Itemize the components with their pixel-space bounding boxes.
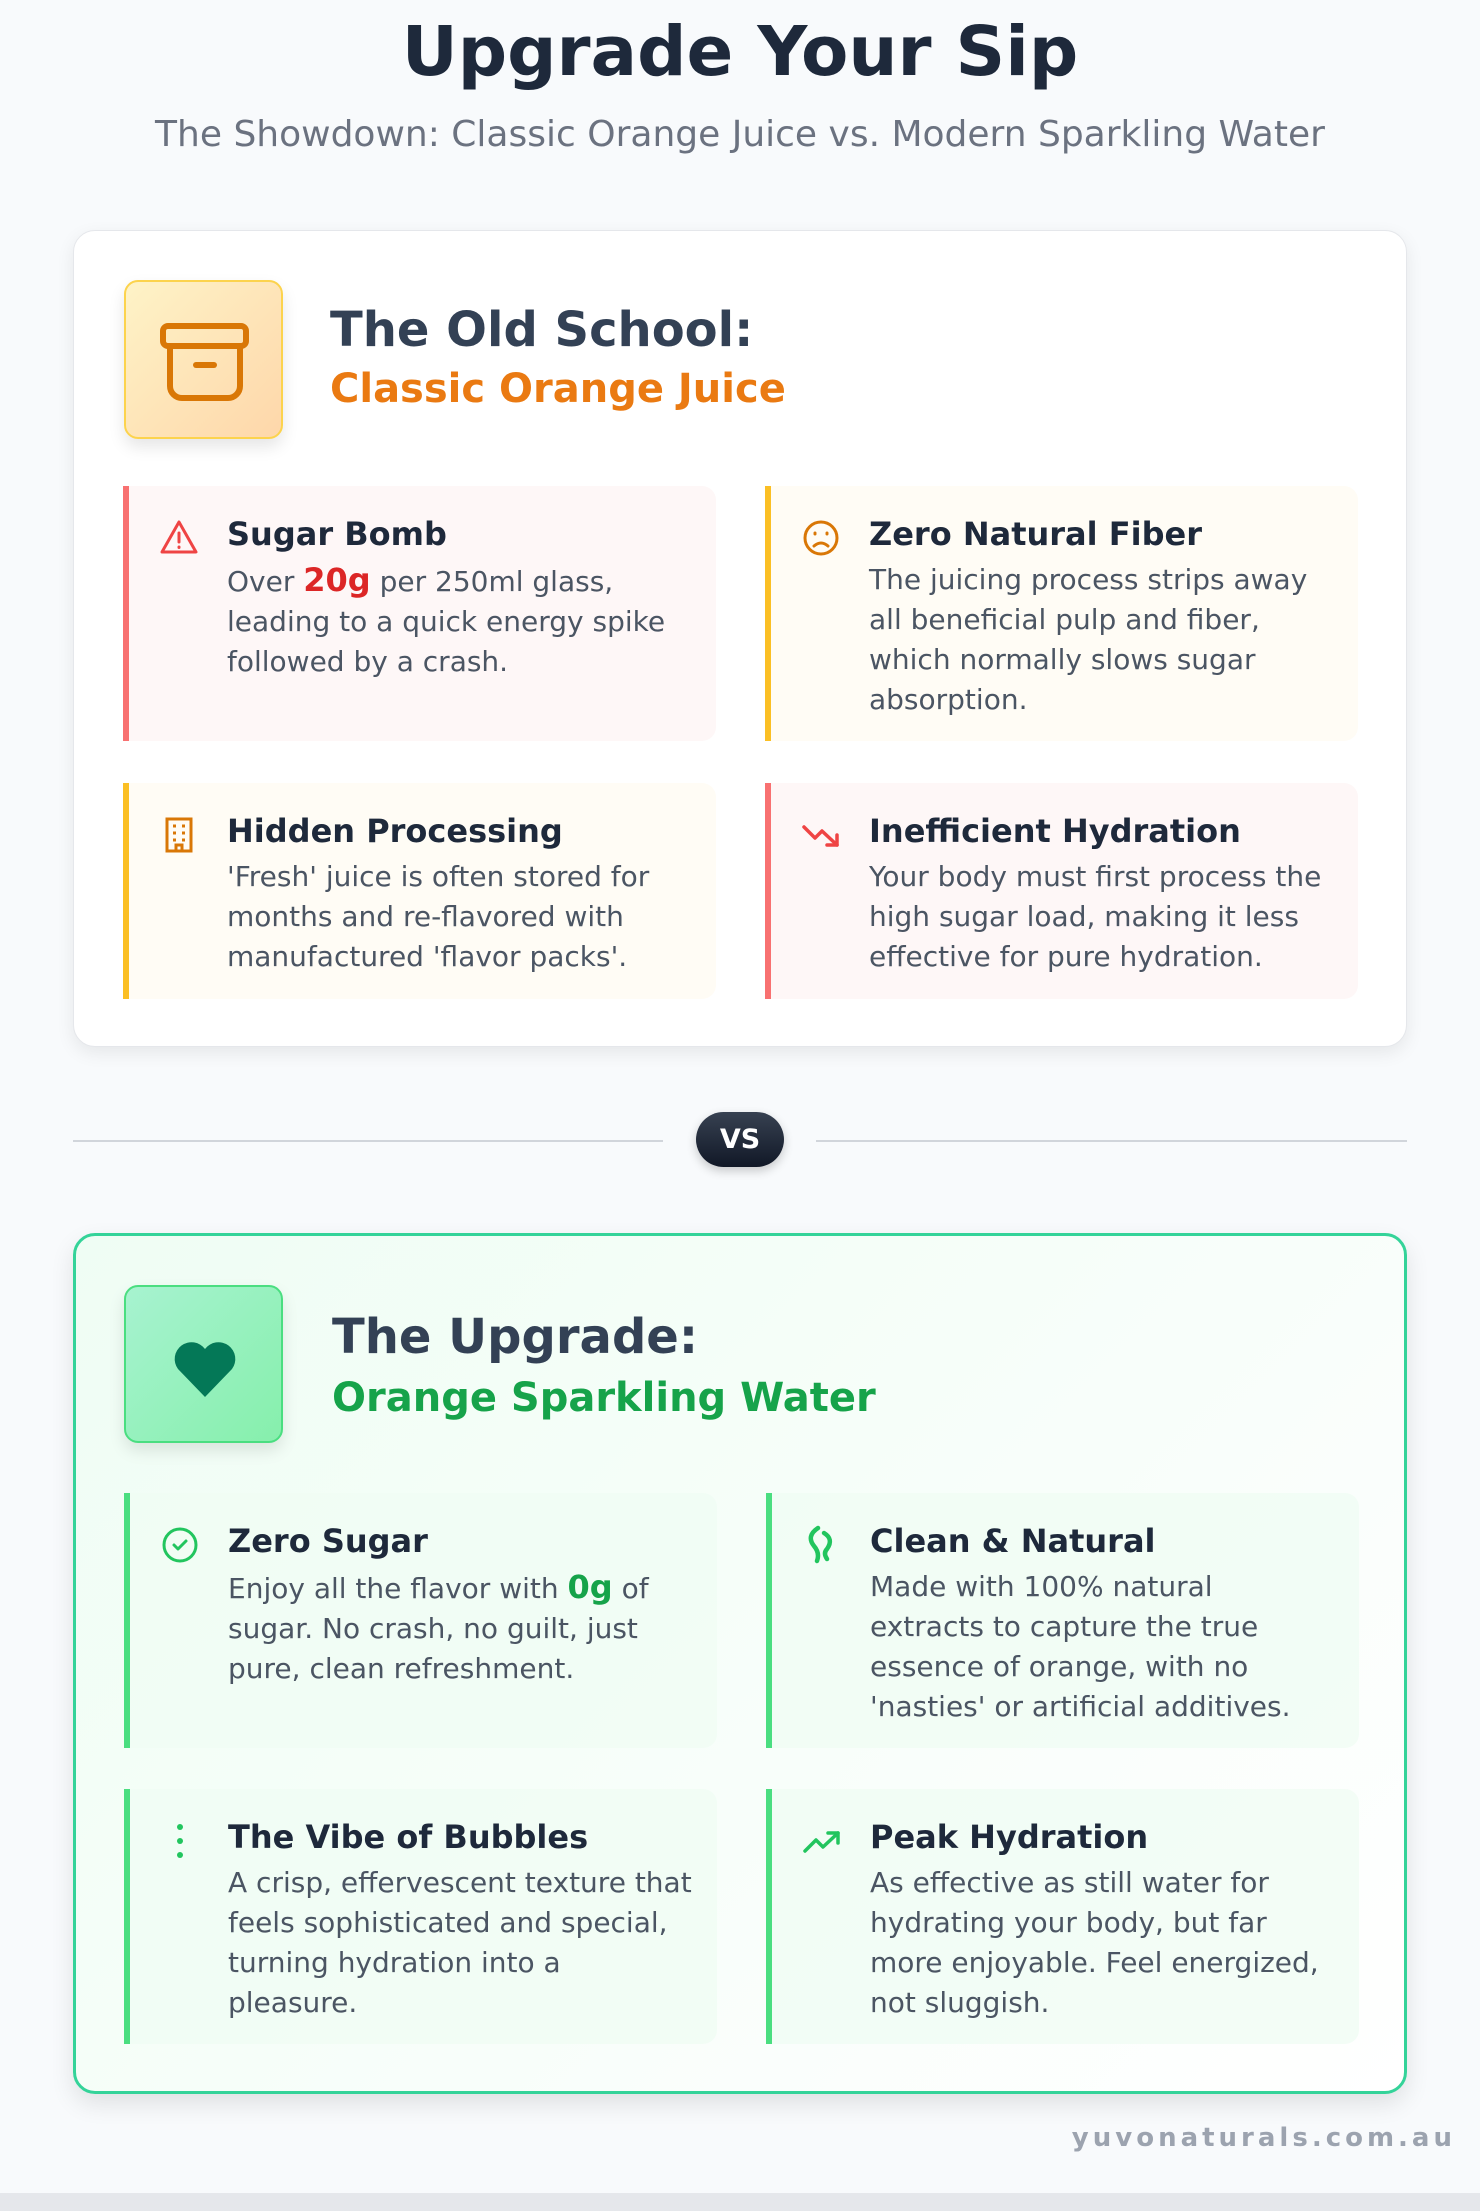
icon: sad face (804, 520, 838, 556)
feature: bubbles: A crisp, effervescent texture that feels sophisticated and special, turning hydration into a pleasure. (228, 1866, 692, 2019)
feature: peak hydration: Peak Hydration (870, 1818, 1148, 1856)
feature: peak hydration: As effective as still water for hydrating your body, but far more enjoyable. Feel energized, not sluggish. (870, 1866, 1319, 2019)
feature: sugar bomb: Over 20g per 250ml glass, leading to a quick energy spike followed by a crash. (227, 561, 665, 678)
feature: inefficient hydration (765, 783, 1358, 999)
panel: upgrade (73, 1233, 1407, 2094)
footer url: yuvonaturals.com.au (1072, 2123, 1456, 2153)
icon: building (166, 818, 192, 852)
feature: clean natural: Made with 100% natural extracts to capture the true essence of orange, with no 'nasties' or artificial additives. (870, 1570, 1291, 1723)
title: Upgrade Your Sip (402, 12, 1078, 92)
feature: zero sugar: Zero Sugar (228, 1522, 428, 1560)
feature: hidden processing: Hidden Processing (227, 812, 563, 850)
feature: zero fiber (765, 486, 1358, 741)
vs badge: VS (720, 1124, 760, 1155)
feature: sugar bomb: Sugar Bomb (227, 515, 447, 553)
icon: dots (177, 1824, 183, 1858)
heading (332, 1309, 876, 1421)
subtitle: The Showdown: Classic Orange Juice vs. Modern Sparkling Water (155, 114, 1325, 155)
feature: zero sugar: Enjoy all the flavor with 0g of sugar. No crash, no guilt, just pure, clean refreshment. (228, 1568, 649, 1685)
heading: The Upgrade: (332, 1309, 698, 1365)
feature: bubbles (124, 1789, 717, 2044)
feature: clean natural (766, 1493, 1359, 1748)
feature: inefficient hydration: Your body must first process the high sugar load, making it less effective for pure hydration. (869, 860, 1321, 973)
heading: Classic Orange Juice (330, 366, 786, 412)
feature: zero fiber: Zero Natural Fiber (869, 515, 1202, 553)
icon: box (124, 280, 283, 439)
heading (330, 302, 786, 412)
feature: zero fiber: The juicing process strips away all beneficial pulp and fiber, which normally slows sugar absorption. (869, 563, 1307, 716)
icon: warning (160, 520, 198, 554)
bottom bar (0, 2193, 1480, 2211)
icon: trend up (803, 1831, 840, 1853)
icon: trend down (802, 825, 839, 847)
feature: inefficient hydration: Inefficient Hydration (869, 812, 1241, 850)
heading: Orange Sparkling Water (332, 1375, 876, 1421)
feature: peak hydration (766, 1789, 1359, 2044)
icon: heart (124, 1285, 283, 1443)
icon: leaf cycle (808, 1526, 832, 1564)
feature: sugar bomb (123, 486, 716, 741)
feature: clean natural: Clean & Natural (870, 1522, 1156, 1560)
feature: zero sugar (124, 1493, 717, 1748)
feature: hidden processing: 'Fresh' juice is often stored for months and re-flavored with manufactured 'flavor packs'. (227, 860, 649, 973)
icon: check circle (162, 1528, 198, 1562)
vs badge (696, 1112, 784, 1167)
panel: old school (73, 230, 1407, 1047)
heading: The Old School: (330, 302, 753, 358)
feature: bubbles: The Vibe of Bubbles (228, 1818, 588, 1856)
feature: hidden processing (123, 783, 716, 999)
